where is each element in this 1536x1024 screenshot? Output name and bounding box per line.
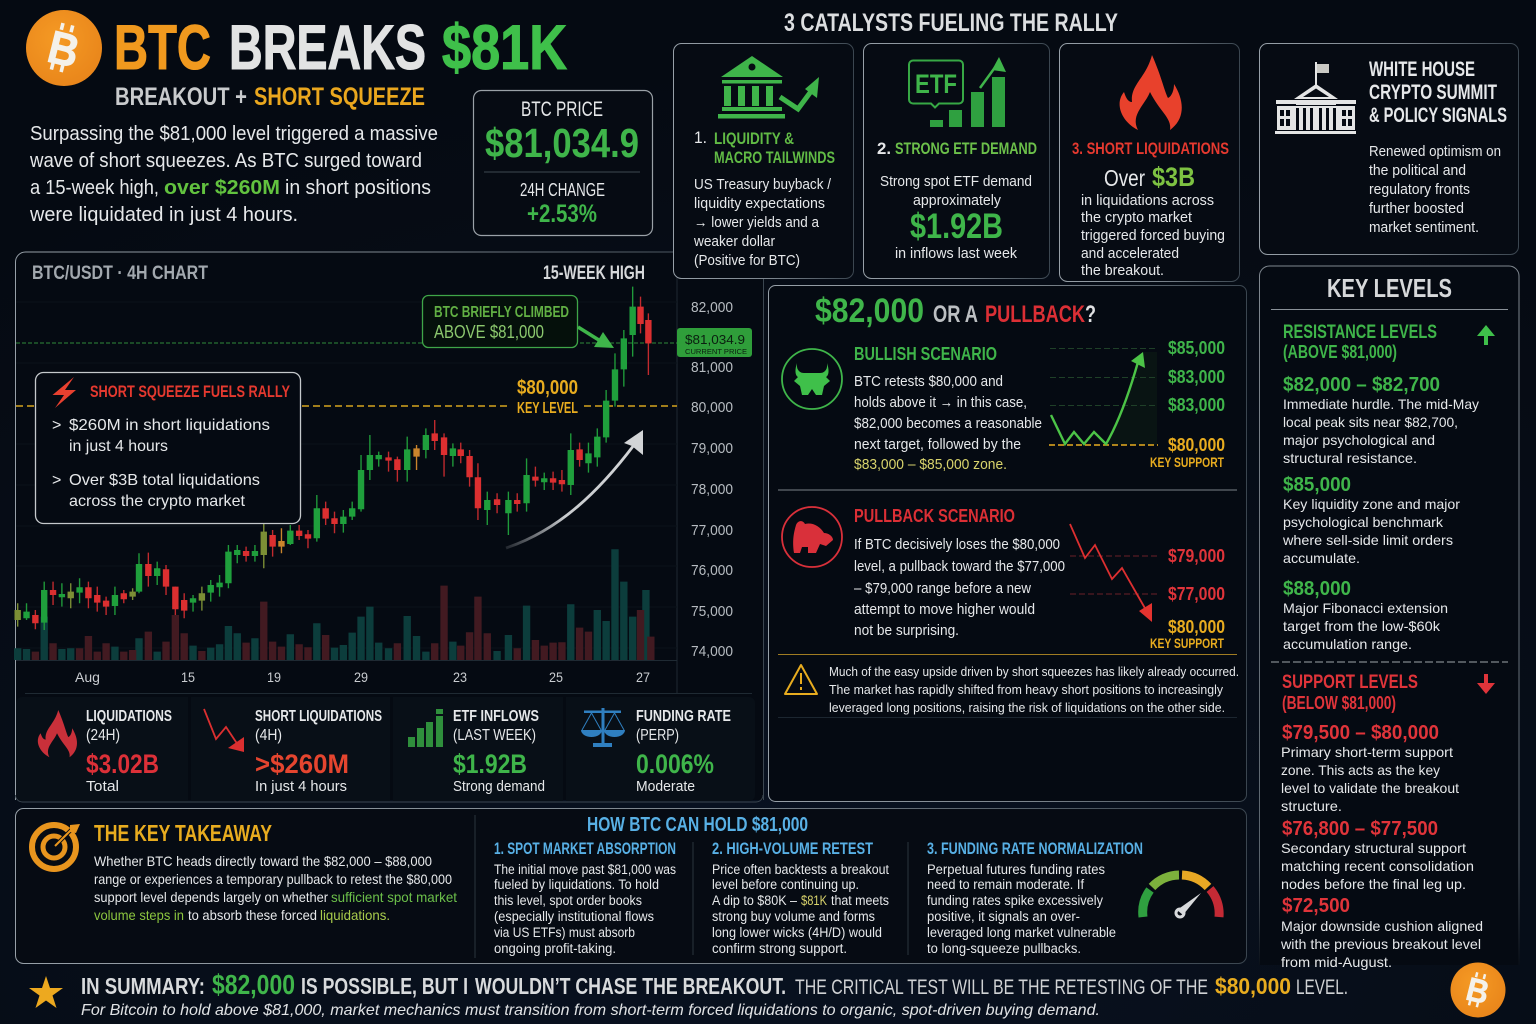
title: BTC: [114, 13, 211, 83]
arrow: green to price: [578, 327, 614, 348]
stat: funding rate: Moderate: [636, 778, 695, 795]
panel: White House: WHITE HOUSE: [1369, 58, 1475, 81]
price axis labels: 80,000: [691, 399, 733, 416]
pullback scenario: not be surprising.: [854, 622, 959, 639]
tag: current price: [677, 328, 752, 357]
subtitle: [115, 83, 425, 111]
subtitle: BREAKOUT +: [115, 83, 247, 111]
column 1: fueled by liquidations. To hold: [494, 877, 659, 892]
panel: White House: the political and: [1369, 162, 1466, 179]
stat: liquidations: $3.02B: [86, 749, 159, 779]
panel: catalyst 1 liquidity: weaker dollar: [693, 233, 775, 250]
summary italic line: For Bitcoin to hold above $81,000, market mechanics must transition from short-term forced liquidations to organic, spot-driven buying demand.: [81, 1002, 1100, 1019]
stat: liquidations: Total: [86, 778, 119, 795]
key takeaway: Whether BTC heads directly toward the $82,000 – $88,000: [94, 853, 432, 869]
stat: short liquidations: SHORT LIQUIDATIONS: [255, 708, 382, 725]
stat: short liquidations: In just 4 hours: [255, 778, 347, 795]
date axis labels: 19: [267, 669, 281, 685]
icon: red down arrow: [204, 709, 244, 752]
arrow: white curved: [506, 430, 643, 548]
date axis labels: 27: [636, 669, 650, 685]
subtitle: SHORT SQUEEZE: [254, 83, 425, 111]
panel: catalyst 3 short liquidations: the crypto market: [1081, 209, 1193, 226]
resistance levels: psychological benchmark: [1283, 514, 1444, 530]
price axis labels: [691, 299, 733, 660]
stat: liquidations: [38, 708, 172, 795]
scenario heading: $82,000: [815, 292, 924, 330]
how BTC can hold: [494, 814, 1219, 956]
callout: short squeeze: SHORT SQUEEZE FUELS RALLY: [90, 382, 290, 401]
pullback scenario: – $79,000 range before a new: [854, 580, 1031, 597]
key takeaway: sufficient spot market: [331, 889, 457, 905]
resistance levels: target from the low-$60k: [1283, 618, 1441, 634]
mini chart: bullish: $80,000: [1168, 435, 1225, 455]
intro text: wave of short squeezes. As BTC surged toward: [29, 150, 422, 172]
scenario heading: OR A: [933, 301, 978, 328]
resistance levels: structural resistance.: [1283, 450, 1417, 466]
date axis labels: [75, 669, 650, 685]
stat: ETF inflows: $1.92B: [453, 749, 527, 779]
stat: ETF inflows: Strong demand: [453, 778, 545, 795]
support levels: with the previous breakout level: [1280, 936, 1481, 952]
callout: BTC briefly climbed: [422, 296, 578, 348]
tag: current price: CURRENT PRICE: [685, 349, 747, 356]
resistance levels: $85,000: [1283, 474, 1351, 496]
bullish scenario: $83,000 – $85,000 zone.: [854, 456, 1007, 473]
stat: funding rate: [581, 708, 731, 795]
key takeaway: range or experiences a temporary pullback to retest the $80,000: [94, 871, 452, 887]
column 3: funding rates spike excessively: [927, 893, 1103, 908]
scenario heading: PULLBACK: [985, 301, 1085, 328]
resistance levels: (ABOVE $81,000): [1283, 342, 1397, 362]
label: 15-week high: 15-WEEK HIGH: [543, 263, 645, 284]
warning note: Much of the easy upside driven by short squeezes has likely already occurred.: [829, 664, 1239, 679]
price axis labels: 77,000: [691, 522, 733, 539]
resistance levels: [1282, 322, 1495, 652]
intro text: [29, 123, 438, 226]
resistance levels: major psychological and: [1283, 432, 1435, 448]
column 1: via US ETFs) must absorb: [494, 925, 635, 940]
resistance levels: $82,000 – $82,700: [1283, 374, 1440, 396]
24h change value: +2.53%: [527, 200, 597, 228]
how BTC can hold: HOW BTC CAN HOLD $81,000: [587, 814, 808, 836]
stat: ETF inflows: (LAST WEEK): [453, 727, 536, 744]
resistance levels: Key liquidity zone and major: [1283, 496, 1460, 512]
column 2: long lower wicks (4H/D) would: [712, 925, 882, 940]
stat: short liquidations: (4H): [255, 727, 282, 744]
resistance levels: accumulate.: [1283, 550, 1360, 566]
summary line: $80,000: [1215, 973, 1291, 999]
heading: key levels: KEY LEVELS: [1327, 273, 1452, 303]
intro text: in short positions: [285, 177, 431, 199]
panel: White House: market sentiment.: [1369, 219, 1479, 236]
support levels: from mid-August.: [1281, 954, 1392, 970]
panel: catalyst 3 short liquidations: $3B: [1152, 162, 1195, 192]
panel: chart: [16, 252, 764, 802]
icon: bars: [408, 709, 443, 747]
panel: catalyst 3 short liquidations: and accelerated: [1081, 245, 1179, 262]
support levels: matching recent consolidation: [1281, 858, 1474, 874]
bullish scenario: BULLISH SCENARIO: [854, 344, 997, 364]
summary line: LEVEL.: [1296, 976, 1348, 999]
pullback scenario: If BTC decisively loses the $80,000: [854, 536, 1060, 553]
intro text: over $260M: [164, 177, 280, 199]
support levels: zone. This acts as the key: [1281, 762, 1440, 778]
pullback scenario: PULLBACK SCENARIO: [854, 506, 1015, 526]
key takeaway: THE KEY TAKEAWAY: [94, 820, 272, 846]
support levels: SUPPORT LEVELS: [1282, 672, 1418, 693]
date axis labels: 25: [549, 669, 563, 685]
summary line: [81, 969, 1348, 1000]
panel: catalyst 2 ETF: Strong spot ETF demand: [880, 173, 1032, 190]
support levels: $79,500 – $80,000: [1282, 722, 1439, 744]
support levels: Primary short-term support: [1281, 744, 1453, 760]
summary line: THE CRITICAL TEST WILL BE THE RETESTING OF THE: [795, 976, 1208, 999]
panel: catalyst 1 liquidity: (Positive for BTC): [694, 252, 800, 269]
intro text: Surpassing the $81,000 level triggered a massive: [30, 123, 438, 145]
panel: catalyst 1 liquidity: MACRO TAILWINDS: [714, 148, 835, 167]
price axis labels: 74,000: [691, 643, 733, 660]
icon: ETF bars: ETF: [915, 69, 957, 99]
panel: catalyst 3 short liquidations: the breakout.: [1081, 262, 1164, 279]
date axis labels: 23: [453, 669, 467, 685]
panel: catalyst 2 ETF: 2.: [877, 139, 891, 158]
panel: catalyst 3 short liquidations: in liquidations across: [1081, 192, 1214, 209]
stat: funding rate: FUNDING RATE: [636, 708, 731, 725]
label: 80,000 key level: $80,000: [517, 377, 578, 399]
ETF amount: $1.92B: [910, 207, 1003, 246]
column 2: that meets: [831, 893, 889, 908]
stat: liquidations: (24H): [86, 727, 120, 744]
support levels: Secondary structural support: [1281, 840, 1466, 856]
column 3: 3. FUNDING RATE NORMALIZATION: [927, 839, 1143, 858]
icon: bitcoin coin: B: [43, 20, 85, 78]
icon: warning triangle: [785, 665, 817, 694]
callout: short squeeze: in just 4 hours: [69, 438, 168, 455]
pullback scenario: attempt to move higher would: [854, 601, 1035, 618]
callout: short squeeze: $260M in short liquidations: [69, 417, 270, 434]
panel: catalyst 2 ETF: [864, 44, 1050, 278]
header: title block: [26, 10, 567, 226]
warning note: leveraged long positions, raising the risk of liquidations on the other side.: [829, 700, 1225, 715]
panel: White House: regulatory fronts: [1369, 181, 1470, 198]
panel: catalyst 1 liquidity: [674, 44, 854, 278]
resistance levels: RESISTANCE LEVELS: [1283, 322, 1437, 343]
icon: scale: [581, 708, 625, 747]
column 2: A dip to $80K –: [712, 893, 797, 908]
callout: short squeeze: [36, 372, 300, 524]
column 2: confirm strong support.: [712, 941, 847, 956]
support levels: Major downside cushion aligned: [1281, 918, 1483, 934]
mini chart: pullback: $80,000: [1168, 617, 1225, 637]
mini chart: pullback: $79,000: [1168, 546, 1225, 566]
date axis labels: 29: [354, 669, 368, 685]
pullback scenario: [782, 506, 1225, 651]
column 3: positive, it signals an over-: [927, 909, 1080, 924]
callout: BTC briefly climbed: ABOVE $81,000: [434, 322, 544, 342]
panel: catalyst 3 short liquidations: [1060, 44, 1240, 282]
panel: catalyst 2 ETF: STRONG ETF DEMAND: [895, 139, 1037, 158]
icon: bitcoin coin small: [1450, 962, 1506, 1018]
date axis labels: 15: [181, 669, 195, 685]
price axis labels: 76,000: [691, 562, 733, 579]
stat: ETF inflows: [408, 708, 545, 795]
support levels: [1280, 672, 1495, 970]
stat: short liquidations: [204, 708, 382, 795]
stat: ETF inflows: ETF INFLOWS: [453, 708, 539, 725]
footer summary: [29, 962, 1506, 1019]
key takeaway: liquidations.: [320, 907, 390, 923]
panel: catalyst 1 liquidity: US Treasury buyback /: [694, 176, 832, 193]
heading: catalysts: 3 CATALYSTS FUELING THE RALLY: [784, 9, 1118, 37]
panel: catalyst 1 liquidity: → lower yields and a: [694, 214, 820, 231]
column 3: [927, 839, 1143, 956]
panel: catalyst 1 liquidity: liquidity expectations: [694, 195, 825, 212]
summary line: $82,000: [212, 969, 295, 1000]
price axis labels: 78,000: [691, 481, 733, 498]
date axis labels: Aug: [75, 669, 100, 685]
summary line: IN SUMMARY:: [81, 973, 205, 999]
column 1: The initial move past $81,000 was: [494, 862, 676, 877]
gauge: [1143, 875, 1219, 917]
icon: up arrow: [1477, 325, 1495, 345]
level line: 80,000: [16, 405, 677, 407]
support levels: structure.: [1281, 798, 1342, 814]
panel: catalyst 1 liquidity: LIQUIDITY &: [714, 129, 794, 148]
intro text: a 15-week high,: [30, 177, 159, 199]
price axis labels: 75,000: [691, 603, 733, 620]
mini chart: bullish: KEY SUPPORT: [1150, 454, 1224, 470]
panel: key levels: [1260, 266, 1519, 970]
mini chart: bullish: $83,000: [1168, 367, 1225, 387]
stat: short liquidations: >$260M: [255, 749, 349, 779]
icon: down arrow: [1477, 674, 1495, 694]
resistance levels: accumulation range.: [1283, 636, 1412, 652]
chart: volume bars: [18, 549, 651, 660]
bullish scenario: $82,000 becomes a reasonable: [854, 415, 1042, 432]
icon: bitcoin coin small: B: [1463, 970, 1493, 1011]
key takeaway: volume steps in: [94, 907, 184, 923]
panel: White House: Renewed optimism on: [1369, 143, 1501, 160]
mini chart: bullish: $85,000: [1168, 338, 1225, 358]
column 1: ongoing profit-taking.: [494, 941, 616, 956]
resistance levels: Major Fibonacci extension: [1283, 600, 1448, 616]
support levels: $76,800 – $77,500: [1282, 818, 1438, 840]
chart title: BTC/USDT · 4H CHART: [32, 263, 208, 284]
label: 80,000 key level: KEY LEVEL: [517, 400, 578, 417]
column 2: $81K: [801, 893, 827, 908]
label: 80,000 key level: [517, 377, 578, 417]
resistance levels: where sell-side limit orders: [1282, 532, 1453, 548]
icon: bitcoin coin: [26, 10, 102, 86]
column 1: 1. SPOT MARKET ABSORPTION: [494, 839, 676, 858]
price axis labels: 79,000: [691, 440, 733, 457]
callout: short squeeze: >: [52, 417, 61, 434]
title: [114, 13, 567, 83]
callout: BTC briefly climbed: BTC BRIEFLY CLIMBED: [434, 304, 569, 321]
stat: funding rate: (PERP): [636, 727, 679, 744]
icon: bull: [782, 349, 842, 409]
key takeaway: to absorb these forced: [188, 907, 317, 923]
column 2: [712, 839, 889, 956]
panel: catalyst 2 ETF: approximately: [913, 192, 1001, 209]
pullback scenario: level, a pullback toward the $77,000: [854, 558, 1065, 575]
column 2: strong buy volume and forms: [712, 909, 875, 924]
support levels: level to validate the breakout: [1281, 780, 1459, 796]
icon: small flame: [38, 710, 77, 757]
icon: target: [32, 824, 80, 869]
column 3: need to remain moderate. If: [927, 877, 1084, 892]
panel: catalyst 1 liquidity: 1.: [694, 128, 707, 147]
column 3: Perpetual futures funding rates: [927, 862, 1105, 877]
panel: catalyst 2 ETF: in inflows last week: [895, 245, 1017, 262]
warning note: [785, 664, 1239, 715]
tag: current price: $81,034.9: [685, 332, 745, 347]
panel: White House: [1260, 44, 1518, 254]
callout: short squeeze: >: [52, 472, 61, 489]
chart: candlesticks: [18, 287, 648, 630]
scenario heading: ?: [1085, 301, 1096, 328]
icon: bank with arrow: [718, 56, 819, 118]
summary line: WOULDN’T CHASE THE BREAKOUT.: [475, 973, 786, 999]
resistance levels: $88,000: [1283, 578, 1351, 600]
price axis labels: 81,000: [691, 359, 733, 376]
panel: BTC price: [474, 90, 652, 236]
warning note: The market has rapidly shifted from heavy short positions to increasingly: [829, 682, 1223, 697]
support levels: (BELOW $81,000): [1282, 693, 1396, 713]
icon: bear: [782, 507, 842, 567]
icon: ETF bars: [909, 57, 1006, 127]
icon: star: [29, 976, 63, 1008]
column 3: to long-squeeze pullbacks.: [927, 941, 1081, 956]
column 2: 2. HIGH-VOLUME RETEST: [712, 839, 873, 858]
panel: catalyst 3 short liquidations: Over: [1104, 165, 1145, 191]
panel: catalyst 3 short liquidations: triggered forced buying: [1081, 227, 1225, 244]
summary line: IS POSSIBLE, BUT I: [301, 973, 468, 999]
bullish scenario: next target, followed by the: [854, 436, 1021, 453]
column 2: level before continuing up.: [712, 877, 859, 892]
mini chart: bullish: $83,000: [1168, 395, 1225, 415]
icon: lightning bolt: [52, 377, 76, 408]
bullish scenario: [782, 338, 1225, 473]
callout: short squeeze: across the crypto market: [69, 493, 246, 510]
bullish scenario: holds above it → in this case,: [854, 394, 1027, 411]
support levels: $72,500: [1282, 895, 1350, 917]
support levels: nodes before the final leg up.: [1281, 876, 1466, 892]
price axis labels: 82,000: [691, 299, 733, 316]
price value: $81,034.9: [485, 120, 639, 166]
stats row: [16, 697, 755, 801]
mini chart: pullback: $77,000: [1168, 584, 1225, 604]
column 1: (especially institutional flows: [494, 909, 654, 924]
panel: scenarios: [768, 286, 1246, 802]
panel: BTC price: 24H CHANGE: [520, 180, 605, 200]
icon: White House: [1275, 62, 1356, 134]
column 1: [494, 839, 676, 956]
bullish scenario: BTC retests $80,000 and: [854, 373, 1003, 390]
scenario heading: [815, 292, 1096, 330]
icon: flame: [1120, 55, 1182, 130]
mini chart: pullback: KEY SUPPORT: [1150, 635, 1224, 651]
column 1: this level, spot order books: [494, 893, 642, 908]
key takeaway: support level depends largely on whether: [94, 889, 328, 905]
resistance levels: local peak sits near $82,700,: [1283, 414, 1458, 430]
mini chart: bullish: [1049, 338, 1225, 470]
column 3: leveraged long market vulnerable: [927, 925, 1116, 940]
column 2: Price often backtests a breakout: [712, 862, 889, 877]
stat: funding rate: 0.006%: [636, 749, 714, 779]
key takeaway: [32, 820, 457, 923]
level line: current price: [16, 342, 677, 344]
panel: White House: further boosted: [1369, 200, 1464, 217]
stat: liquidations: LIQUIDATIONS: [86, 708, 172, 725]
panel: BTC price: BTC PRICE: [521, 98, 603, 121]
resistance levels: Immediate hurdle. The mid-May: [1283, 396, 1479, 412]
intro text: were liquidated in just 4 hours.: [29, 204, 298, 226]
title: BREAKS: [229, 13, 426, 83]
panel: catalyst 3 short liquidations: 3. SHORT LIQUIDATIONS: [1072, 139, 1229, 158]
mini chart: pullback: [1070, 524, 1225, 651]
callout: short squeeze: Over $3B total liquidations: [69, 472, 260, 489]
title: $81K: [442, 13, 567, 83]
panel: takeaway and how-to: [16, 808, 1246, 964]
